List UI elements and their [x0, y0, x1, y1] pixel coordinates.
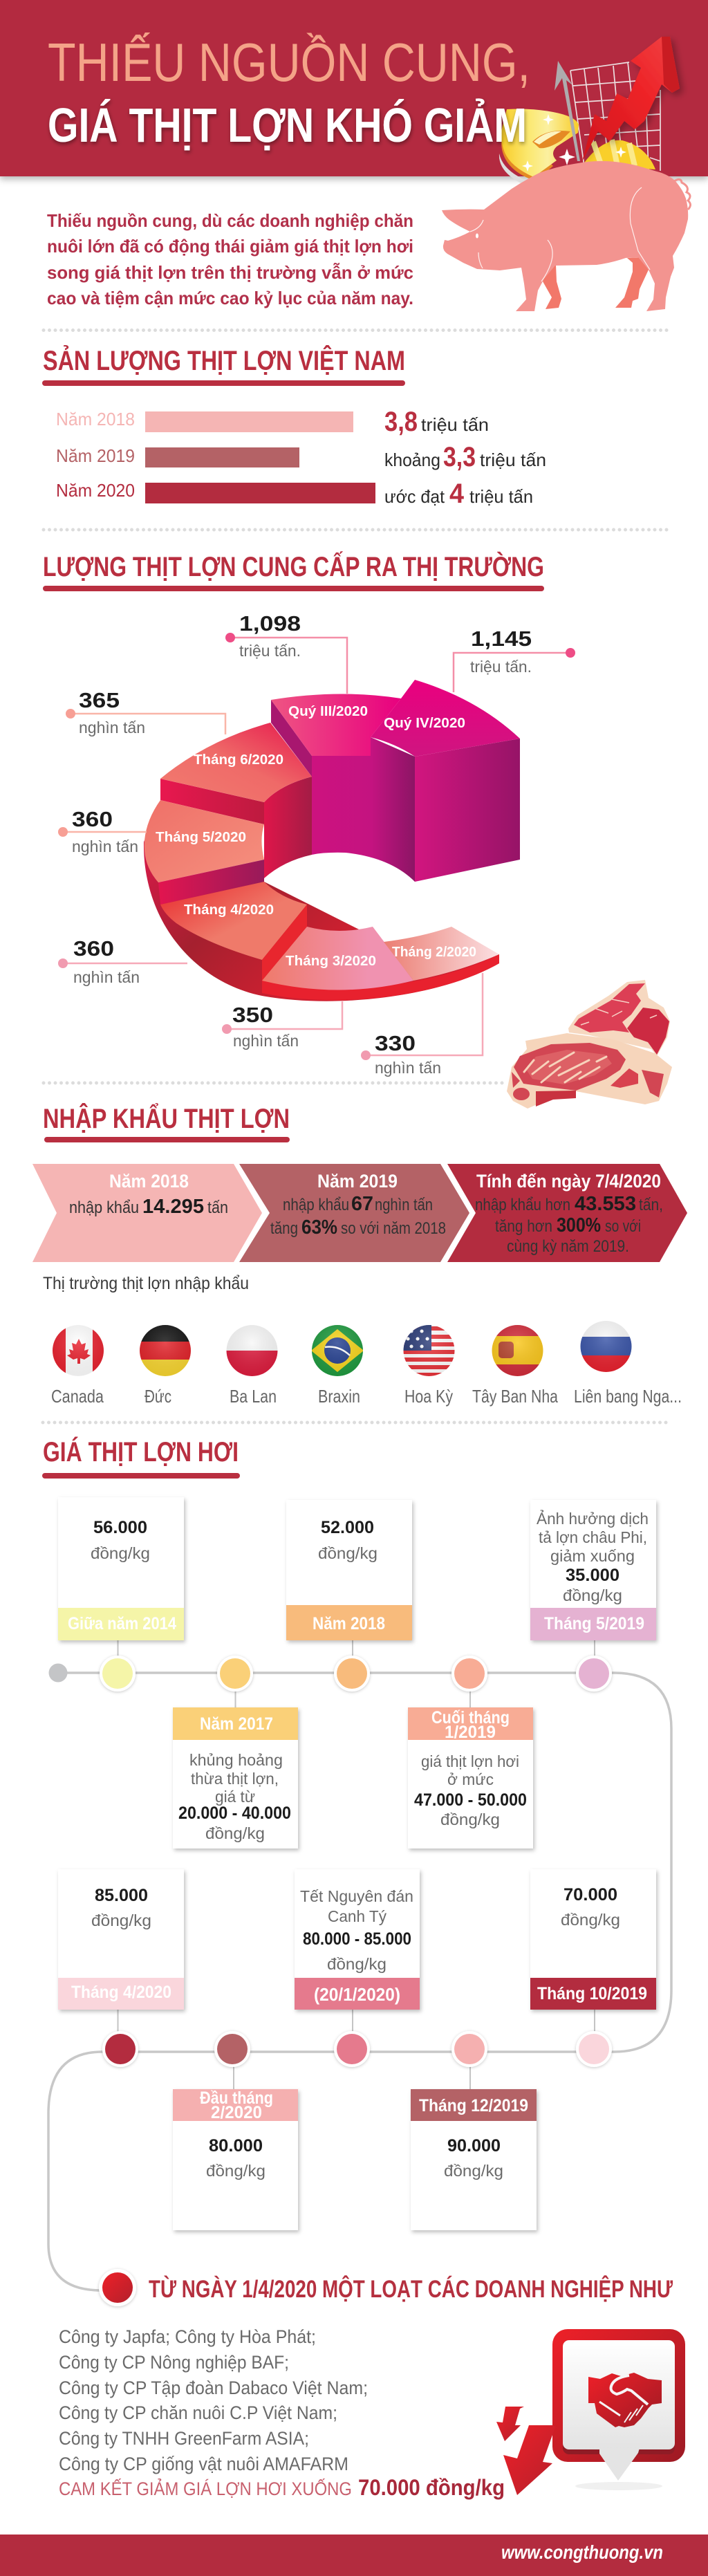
flag: Germany: Đức — [145, 1386, 171, 1407]
milestone: Tet 2020: Tết Nguyên đán — [300, 1887, 413, 1905]
illustration: price chart with coins — [499, 37, 680, 185]
callout: May — [58, 807, 147, 855]
company list: Công ty CP Tập đoàn Dabaco Việt Nam; — [59, 2378, 368, 2398]
heading: pork imports: NHẬP KHẨU THỊT LỢN — [43, 1102, 290, 1134]
illustration: raw meat — [507, 980, 672, 1109]
heading: live pig price — [42, 1436, 240, 1479]
flag: United States — [403, 1325, 455, 1407]
bar 2019: triệu tấn — [480, 450, 546, 470]
timeline path — [48, 1673, 671, 2290]
arrow panel: 2020 — [447, 1164, 687, 1262]
milestone: late Jan 2019: 1/2019 — [445, 1723, 496, 1742]
arrow panel: 2019: tăng — [270, 1219, 298, 1238]
back steak — [568, 980, 670, 1056]
bar 2020: triệu tấn — [469, 486, 533, 507]
slice labels: Tháng 6/2020 — [194, 752, 283, 768]
flag: Russia — [574, 1321, 682, 1407]
title: THIẾU NGUỒN CUNG, — [48, 32, 530, 93]
3D donut chart — [144, 680, 520, 1001]
callout: March: 350 — [232, 1003, 273, 1027]
milestone: Apr 2020 — [58, 1869, 184, 2067]
icon: handshake — [588, 2373, 662, 2427]
milestone: 2018: đồng/kg — [318, 1544, 378, 1562]
callout: Q3: triệu tấn. — [239, 642, 301, 660]
flag: Spain: Tây Ban Nha — [472, 1386, 558, 1407]
flag: Brazil — [311, 1325, 364, 1407]
arrow panel: 2020: Tính đến ngày 7/4/2020 — [476, 1171, 661, 1192]
footer band — [0, 2535, 708, 2576]
callout: April — [58, 936, 187, 986]
milestone: Apr 2020: 85.000 — [95, 1886, 148, 1905]
milestone: Dec 2019 — [411, 2031, 537, 2230]
flag: United States: Hoa Kỳ — [404, 1386, 453, 1407]
arrow panel: 2019: 67 — [351, 1193, 373, 1215]
slice labels: Quý IV/2020 — [384, 716, 465, 731]
milestone: May 2019: đồng/kg — [563, 1586, 622, 1604]
intro text — [47, 210, 413, 308]
milestone: Apr 2020: đồng/kg — [91, 1911, 151, 1929]
arrow panel: 2020: nhập khẩu hơn — [475, 1196, 570, 1214]
flag: Poland — [226, 1325, 278, 1407]
milestone: 2017: 20.000 - 40.000 — [178, 1804, 291, 1823]
arrow panel: 2019: so với năm 2018 — [341, 1219, 446, 1238]
company list — [59, 2326, 368, 2474]
slice labels: Tháng 4/2020 — [184, 902, 274, 918]
flag: Canada: Canada — [51, 1386, 104, 1407]
flag: Spain — [472, 1325, 558, 1407]
heading: pork imports — [43, 1102, 290, 1142]
timeline start — [48, 1664, 68, 1682]
milestone: 2017: Năm 2017 — [200, 1714, 273, 1734]
header band — [0, 0, 708, 176]
bar 2018 — [56, 407, 489, 437]
slice: Q3 — [271, 694, 415, 882]
company list: Công ty Japfa; Công ty Hòa Phát; — [59, 2326, 316, 2347]
milestone: Tet 2020 — [295, 1869, 420, 2067]
milestone: 2017: giá từ — [215, 1788, 255, 1806]
milestone: 2018: Năm 2018 — [313, 1614, 385, 1633]
arrow panel: 2020: cùng kỳ năm 2019. — [507, 1237, 629, 1256]
callout: Q4: triệu tấn. — [470, 658, 532, 676]
callout: February: 330 — [375, 1031, 416, 1055]
subheading: import markets: Thị trường thịt lợn nhập khẩu — [43, 1274, 249, 1293]
milestone: early Feb 2020: 80.000 — [209, 2136, 263, 2156]
arrow panel: 2018 — [32, 1164, 262, 1262]
bar 2020: ước đạt — [384, 486, 445, 507]
milestone: early Feb 2020 — [173, 2031, 298, 2230]
callout: June: 365 — [79, 688, 120, 712]
heading: pork output: SẢN LƯỢNG THỊT LỢN VIỆT NAM — [43, 344, 405, 376]
milestone: 2017: đồng/kg — [205, 1824, 265, 1842]
bar 2019 — [56, 442, 546, 472]
milestone: May 2019: tả lợn châu Phi, — [539, 1528, 647, 1546]
bar 2020: Năm 2020 — [56, 480, 135, 501]
intro text: Thiếu nguồn cung, dù các doanh nghiệp chăn — [47, 210, 413, 231]
title — [48, 32, 530, 152]
milestone: late Jan 2019: giá thịt lợn hơi — [421, 1752, 519, 1770]
slice: June — [160, 723, 312, 802]
slice labels: Quý III/2020 — [288, 704, 368, 719]
arrow panel: 2020: tăng hơn — [495, 1217, 552, 1236]
bar 2018: 3,8 — [384, 407, 418, 437]
company list: Công ty TNHH GreenFarm ASIA; — [59, 2428, 309, 2449]
illustration: pig — [442, 161, 690, 311]
flag: Russia: Liên bang Nga... — [574, 1386, 682, 1407]
arrow panel: 2018: tấn — [207, 1198, 228, 1217]
pig body — [442, 161, 688, 311]
milestone: Tet 2020: 80.000 - 85.000 — [303, 1929, 411, 1949]
slice: February — [384, 927, 499, 981]
milestone: Tet 2020: đồng/kg — [327, 1955, 386, 1973]
bar 2018: triệu tấn — [421, 414, 489, 435]
bar 2020 — [56, 479, 533, 509]
milestone: late Jan 2019: Cuối tháng — [431, 1708, 510, 1727]
bar chart: output by year — [56, 407, 546, 509]
milestone: Dec 2019: Tháng 12/2019 — [419, 2096, 528, 2115]
far front leg — [543, 265, 561, 309]
slice labels: Tháng 2/2020 — [392, 945, 476, 960]
commitment line: 70.000 đồng/kg — [358, 2475, 505, 2500]
milestone: May 2019: giảm xuống — [550, 1547, 635, 1565]
footer band: www.congthuong.vn — [501, 2541, 663, 2563]
callout: Q4 — [454, 627, 575, 692]
milestone: Oct 2019 — [530, 1869, 656, 2067]
callout: April: nghìn tấn — [73, 968, 140, 986]
milestone: mid 2014: 56.000 — [93, 1518, 147, 1537]
milestone: Oct 2019: 70.000 — [563, 1885, 617, 1905]
heading: pork output — [42, 344, 405, 386]
milestone: Dec 2019: đồng/kg — [444, 2162, 503, 2180]
callout: Q4: 1,145 — [471, 627, 532, 651]
callout: March: nghìn tấn — [233, 1032, 299, 1050]
arrow panel: 2019: Năm 2019 — [317, 1171, 398, 1192]
company list: Công ty CP giống vật nuôi AMAFARM — [59, 2454, 348, 2474]
arrow panel: 2020: tấn, — [639, 1196, 663, 1214]
milestone: Oct 2019: đồng/kg — [561, 1911, 620, 1929]
callout: Q3: 1,098 — [239, 611, 301, 636]
milestone: late Jan 2019: 47.000 - 50.000 — [414, 1790, 527, 1810]
slice: Q4 — [371, 680, 520, 882]
callout: May: nghìn tấn — [72, 837, 138, 855]
heading: market supply: LƯỢNG THỊT LỢN CUNG CẤP RA THỊ TRƯỜNG — [43, 550, 544, 582]
milestone: May 2019: 35.000 — [566, 1566, 620, 1585]
company list: Công ty CP Nông nghiệp BAF; — [59, 2352, 289, 2373]
milestone: 2017 — [173, 1656, 298, 1848]
flag: Germany — [140, 1325, 191, 1407]
bar 2018: Năm 2018 — [56, 409, 135, 429]
bar 2019: 3,3 — [443, 442, 476, 472]
callout: May: 360 — [72, 807, 113, 831]
arrow panel: 2020: so với — [605, 1217, 641, 1236]
milestone: mid 2014 — [58, 1497, 184, 1692]
slice labels — [156, 704, 476, 969]
callout: February: nghìn tấn — [375, 1059, 441, 1077]
milestone: late Jan 2019 — [408, 1656, 533, 1848]
slice: May — [145, 800, 264, 882]
callout: June — [66, 688, 225, 736]
arrow panel: 2019: 63% — [301, 1216, 337, 1239]
arrow panel: 2018: 14.295 — [142, 1196, 204, 1218]
arrow panel: 2018: nhập khẩu — [69, 1198, 139, 1217]
milestone: 2017: thừa thịt lợn, — [191, 1770, 279, 1788]
milestone: 2018 — [286, 1500, 412, 1692]
icon: down arrows — [496, 2407, 561, 2495]
flag: Brazil: Braxin — [318, 1386, 360, 1407]
milestone: early Feb 2020: Đầu tháng — [200, 2088, 273, 2108]
heading: live pig price: GIÁ THỊT LỢN HƠI — [43, 1436, 239, 1467]
front steak — [507, 1033, 672, 1109]
arrow panel: 2020: 300% — [557, 1214, 601, 1236]
callout: February — [361, 973, 483, 1077]
milestone: 2018: 52.000 — [321, 1518, 374, 1537]
milestone: late Jan 2019: ở mức — [447, 1770, 494, 1788]
milestone: Apr 2020: Tháng 4/2020 — [71, 1983, 171, 2002]
callout: Q3 — [225, 611, 347, 694]
milestone: 2017: khủng hoảng — [189, 1751, 283, 1769]
flag: Poland: Ba Lan — [230, 1386, 277, 1407]
milestone: early Feb 2020: đồng/kg — [206, 2162, 266, 2180]
commitment line — [59, 2475, 505, 2500]
slice labels: Tháng 5/2020 — [156, 830, 246, 845]
slice: April — [160, 882, 307, 960]
milestone: Tet 2020: Canh Tý — [328, 1907, 386, 1925]
milestone: early Feb 2020: 2/2020 — [211, 2103, 262, 2122]
heading: market supply — [43, 550, 544, 591]
intro text: song giá thịt lợn trên thị trường vẫn ở mức — [47, 262, 413, 283]
milestone: Dec 2019: 90.000 — [447, 2136, 501, 2156]
milestone: May 2019: Ảnh hưởng dịch — [537, 1508, 649, 1528]
icon: handshake speech bubble — [552, 2329, 685, 2490]
intro text: nuôi lớn đã có động thái giảm giá thịt lợn hơi — [47, 236, 413, 257]
arrow panel: 2019: nhập khẩu — [283, 1196, 349, 1214]
arrow panel: 2019: nghìn tấn — [375, 1196, 433, 1214]
arrow panel: 2020: 43.553 — [575, 1193, 636, 1215]
far hind leg — [615, 257, 649, 308]
milestone: mid 2014: đồng/kg — [91, 1544, 150, 1562]
milestone: Tet 2020: (20/1/2020) — [314, 1984, 400, 2005]
arrow panel: 2019 — [239, 1164, 469, 1262]
pig tail — [674, 179, 690, 210]
slice labels: Tháng 3/2020 — [286, 954, 376, 969]
bar 2019: khoảng — [384, 450, 440, 470]
flag: Canada — [51, 1325, 104, 1407]
commitment line: CAM KẾT GIẢM GIÁ LỢN HƠI XUỐNG — [59, 2477, 352, 2499]
bar 2019: Năm 2019 — [56, 445, 135, 466]
callout: June: nghìn tấn — [79, 719, 145, 736]
timeline end dot — [99, 2269, 136, 2306]
arrow panel: 2018: Năm 2018 — [109, 1171, 189, 1192]
milestone: Oct 2019: Tháng 10/2019 — [537, 1984, 647, 2003]
bar 2020: 4 — [449, 479, 465, 509]
company list: Công ty CP chăn nuôi C.P Việt Nam; — [59, 2402, 337, 2423]
milestone: May 2019 — [530, 1500, 656, 1692]
title: GIÁ THỊT LỢN KHÓ GIẢM — [48, 98, 527, 152]
intro text: cao và tiệm cận mức cao kỷ lục của năm nay. — [47, 288, 413, 308]
milestone: late Jan 2019: đồng/kg — [440, 1810, 500, 1828]
milestone: May 2019: Tháng 5/2019 — [544, 1614, 644, 1633]
callout: March — [222, 1001, 342, 1050]
callout: April: 360 — [73, 936, 114, 961]
milestone: mid 2014: Giữa năm 2014 — [68, 1614, 176, 1633]
slice: March — [262, 927, 413, 990]
